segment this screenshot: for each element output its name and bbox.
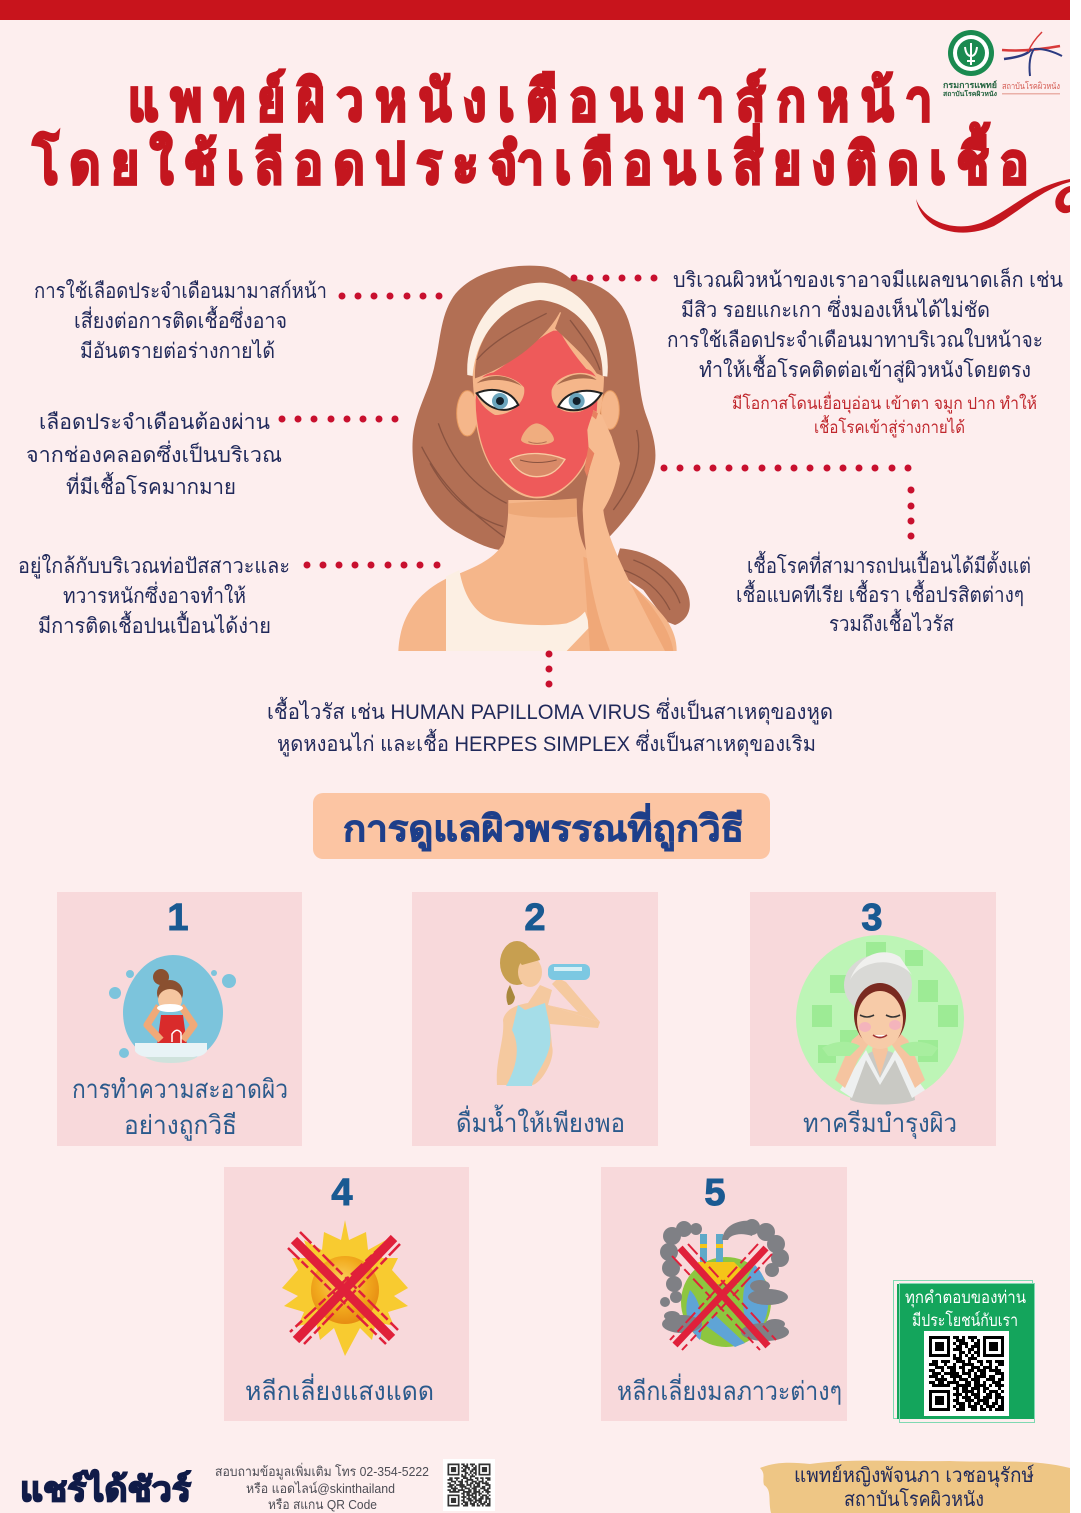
icon: crossed-out polluted earth	[660, 1219, 789, 1350]
text block: right 2: รวมถึงเชื้อไวรัส	[829, 609, 954, 636]
section heading: การดูแลผิวพรรณที่ถูกวิธี	[343, 803, 744, 852]
icon: woman applying cream	[796, 935, 964, 1104]
dotted connector: below illustration	[546, 650, 552, 688]
panel: step 2 drink water: ดื่มน้ำให้เพียงพอ	[456, 1104, 625, 1138]
author credit: สถาบันโรคผิวหนัง	[844, 1488, 984, 1511]
text block: left 2: จากช่องคลอดซึ่งเป็นบริเวณ	[26, 440, 282, 467]
eyebrows	[477, 374, 597, 386]
text block: right 1: บริเวณผิวหน้าของเราอาจมีแผลขนาดเล็ก เช่น	[673, 266, 1063, 292]
logo: department of medical services: กรมการแพทย์	[943, 80, 997, 90]
callout: survey QR card	[894, 1280, 1034, 1422]
left eye	[477, 390, 518, 410]
panel: step 1 cleansing: การทำความสะอาดผิว	[72, 1074, 288, 1104]
text block: left 1: มีอันตรายต่อร่างกายได้	[80, 339, 275, 363]
panel: step 5 avoid pollution: หลีกเลี่ยงมลภาวะต่างๆ	[617, 1373, 842, 1406]
ponytail	[613, 548, 690, 625]
neck shadow	[508, 498, 577, 518]
panel: step 4 avoid sun	[224, 1167, 469, 1421]
panel: step 2 drink water: 2	[524, 897, 546, 939]
dotted connector: top left	[338, 292, 442, 300]
body and neck	[398, 500, 677, 651]
callout: survey QR card: มีประโยชน์กับเรา	[912, 1310, 1018, 1330]
panel: step 3 moisturiser	[750, 892, 996, 1146]
footer QR code	[443, 1459, 495, 1511]
section heading	[313, 793, 770, 859]
logo: department of medical services: สถาบันโรคผิวหนัง	[943, 89, 997, 98]
finger nails	[584, 410, 598, 477]
footer contact: สอบถามข้อมูลเพิ่มเติม โทร 02-354-5222	[215, 1463, 429, 1480]
text block: left 1	[34, 279, 327, 363]
hairline left	[475, 300, 563, 378]
nose	[521, 423, 554, 445]
panel: step 3 moisturiser: 3	[861, 897, 883, 939]
text block: right red note: มีโอกาสโดนเยื่อบุอ่อน เข้าตา จมูก ปาก ทำให้	[732, 391, 1037, 414]
text block: right 2	[736, 551, 1031, 636]
text block: right 1: การใช้เลือดประจำเดือนมาทาบริเวณใบหน้าจะ	[667, 328, 1043, 352]
logo: institute of dermatology	[1002, 32, 1062, 94]
text block: left 3: ทวารหนักซึ่งอาจทำให้	[63, 581, 246, 608]
panel: step 1 cleansing: อย่างถูกวิธี	[124, 1110, 237, 1141]
dotted connector: middle left	[278, 416, 398, 422]
panel: step 3 moisturiser: ทาครีมบำรุงผิว	[803, 1108, 957, 1139]
lips	[510, 454, 565, 477]
right eye	[558, 391, 602, 410]
text block: right 1	[667, 266, 1063, 383]
logo: institute of dermatology: สถาบันโรคผิวหนัง	[1002, 81, 1060, 91]
text block: right 1: ทำให้เชื้อโรคติดต่อเข้าสู่ผิวหนังโดยตรง	[699, 355, 1031, 383]
title: แพทย์ผิวหนังเตือนมาส์กหน้า	[128, 69, 932, 133]
footer brand: แชร์ได้ชัวร์	[20, 1469, 192, 1509]
text block: left 2	[26, 411, 282, 499]
panel: step 1 cleansing	[57, 892, 302, 1146]
face	[473, 308, 604, 498]
footer contact: หรือ สแกน QR Code	[268, 1497, 377, 1512]
panel: step 4 avoid sun: หลีกเลี่ยงแสงแดด	[245, 1373, 434, 1406]
illustration: woman with red face mask	[398, 266, 690, 651]
hair strand lines	[422, 423, 680, 610]
red mask	[475, 330, 599, 497]
dotted connector: right elbow	[660, 464, 914, 540]
footer contact: หรือ แอดไลน์@skinthailand	[246, 1481, 395, 1496]
title	[32, 69, 1028, 196]
callout: survey QR card: ทุกคำตอบของท่าน	[905, 1288, 1026, 1308]
ears	[457, 391, 478, 436]
panel: step 2 drink water	[412, 892, 658, 1146]
left eye area	[475, 375, 524, 415]
text block: left 2: ที่มีเชื้อโรคมากมาย	[66, 472, 236, 499]
icon: crossed-out sun	[282, 1220, 408, 1356]
text block: virus note	[267, 697, 833, 757]
text block: right red note: เชื้อโรคเข้าสู่ร่างกายได้	[814, 415, 965, 438]
author credit	[760, 1461, 1070, 1513]
top red bar	[0, 0, 1070, 20]
text block: virus note: เชื้อไวรัส เช่น HUMAN PAPILLOMA VIRUS ซึ่งเป็นสาเหตุของหูด	[267, 697, 833, 725]
skin over chest	[583, 557, 673, 651]
text block: left 3: มีการติดเชื้อปนเปื้อนได้ง่าย	[38, 611, 271, 638]
hairline right	[555, 307, 604, 377]
red ribbon	[916, 179, 1070, 233]
text block: virus note: หูดหงอนไก่ และเชื้อ HERPES SIMPLEX ซึ่งเป็นสาเหตุของเริม	[277, 729, 816, 757]
tank top	[446, 570, 590, 651]
panel: step 1 cleansing: 1	[167, 897, 189, 939]
text block: left 3	[18, 554, 290, 638]
text block: right 2: เชื้อโรคที่สามารถปนเปื้อนได้มีตั้งแต่	[747, 551, 1031, 578]
footer contact	[215, 1463, 429, 1512]
text block: left 3: อยู่ใกล้กับบริเวณท่อปัสสาวะและ	[18, 554, 290, 579]
icon: woman washing face	[109, 955, 236, 1063]
text block: right red note	[732, 391, 1037, 438]
panel: step 4 avoid sun: 4	[331, 1172, 353, 1214]
author credit: แพทย์หญิงพัจนภา เวชอนุรักษ์	[794, 1464, 1034, 1488]
logo: department of medical services	[943, 30, 997, 98]
headband	[467, 283, 608, 377]
hair	[412, 266, 655, 553]
text block: right 2: เชื้อแบคทีเรีย เชื้อรา เชื้อปรสิตต่างๆ	[736, 580, 1024, 607]
text block: left 2: เลือดประจำเดือนต้องผ่าน	[39, 411, 270, 434]
hand and arm	[583, 410, 665, 651]
icon: woman drinking water	[497, 941, 600, 1086]
right eye area	[552, 373, 600, 412]
panel: step 5 avoid pollution: 5	[704, 1172, 726, 1214]
panel: step 5 avoid pollution	[601, 1167, 847, 1421]
text block: left 1: เสี่ยงต่อการติดเชื้อซึ่งอาจ	[74, 306, 287, 333]
dotted connector: top right	[570, 274, 658, 282]
title: โดยใช้เลือดประจำเดือนเสี่ยงติดเชื้อ	[32, 123, 1028, 196]
text block: right 1: มีสิว รอยแกะเกา ซึ่งมองเห็นได้ไม่ชัด	[681, 295, 990, 322]
text block: left 1: การใช้เลือดประจำเดือนมามาสก์หน้า	[34, 279, 327, 303]
hair lines at top	[477, 313, 600, 370]
dotted connector: lower left	[304, 562, 440, 568]
